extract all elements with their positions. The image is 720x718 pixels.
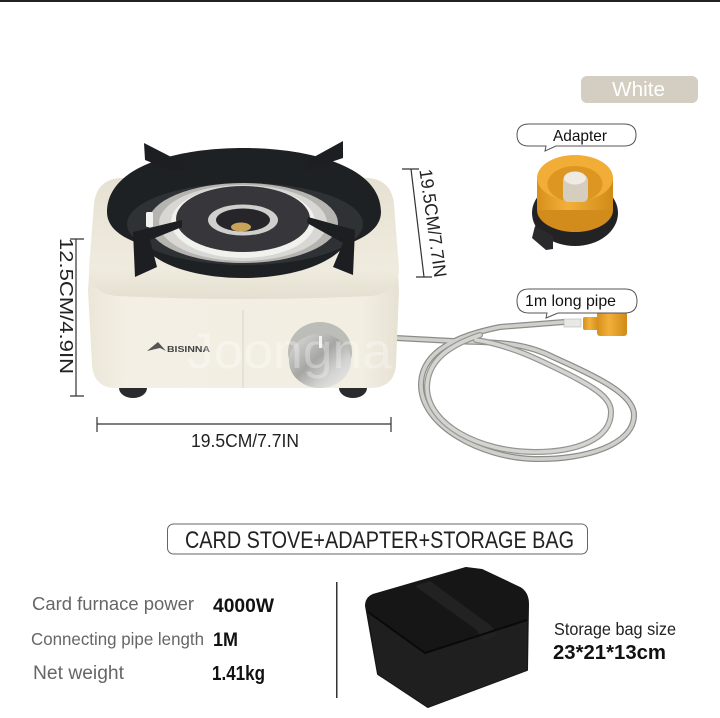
spec: weight: Net weight bbox=[33, 663, 125, 684]
storage bag bbox=[366, 568, 528, 707]
storage bag size bbox=[553, 619, 676, 664]
dimension: height bbox=[56, 238, 84, 396]
spec: power bbox=[32, 594, 274, 617]
brass jet bbox=[231, 222, 251, 232]
brand logo bbox=[147, 342, 210, 354]
stove feet bbox=[119, 378, 367, 398]
knob bbox=[288, 322, 352, 388]
grate dish bbox=[107, 148, 381, 278]
center ring bbox=[208, 204, 278, 236]
storage bag size: Storage bag size bbox=[554, 619, 676, 639]
grate inner floor bbox=[127, 183, 363, 265]
adapter bbox=[532, 155, 618, 250]
spec: power: Card furnace power bbox=[32, 594, 194, 614]
gas pipe bbox=[396, 322, 634, 459]
white mesh rim bbox=[171, 186, 315, 258]
specification list bbox=[31, 594, 274, 685]
color tag: White bbox=[581, 76, 698, 103]
top edge bar bbox=[0, 0, 720, 2]
spec: pipe length: 1M bbox=[213, 630, 238, 651]
color tag: White: White bbox=[612, 79, 665, 101]
spec: power: 4000W bbox=[213, 596, 274, 617]
callout: 1m long pipe: 1m long pipe bbox=[525, 293, 616, 310]
dimension: height: 12.5CM/4.9IN bbox=[56, 238, 76, 374]
grate arms bbox=[133, 141, 355, 277]
callout: 1m long pipe bbox=[517, 289, 637, 318]
stove body bbox=[88, 178, 399, 388]
pipe connector bbox=[564, 310, 627, 336]
stove top plate bbox=[89, 178, 399, 299]
silver burner plate bbox=[148, 183, 338, 263]
igniter bbox=[146, 212, 153, 227]
spec: weight: 1.41kg bbox=[212, 663, 265, 685]
dimension: width: 19.5CM/7.7IN bbox=[191, 431, 299, 451]
black mesh burner bbox=[176, 186, 310, 252]
storage bag size: 23*21*13cm bbox=[553, 642, 666, 664]
watermark: Joongna bbox=[187, 323, 392, 379]
callout: Adapter: Adapter bbox=[553, 128, 608, 145]
stove bbox=[88, 141, 399, 398]
dimension: width bbox=[97, 417, 391, 451]
front panel seam bbox=[242, 310, 244, 388]
callout: Adapter bbox=[517, 124, 636, 151]
package contents label: CARD STOVE+ADAPTER+STORAGE BAG bbox=[185, 527, 574, 554]
brand logo: BISINNA bbox=[167, 345, 210, 354]
spec: weight bbox=[33, 663, 265, 685]
dimension: depth: 19.5CM/7.7IN bbox=[415, 168, 450, 279]
spec: pipe length: Connecting pipe length bbox=[31, 629, 204, 649]
vertical divider bbox=[336, 582, 338, 698]
